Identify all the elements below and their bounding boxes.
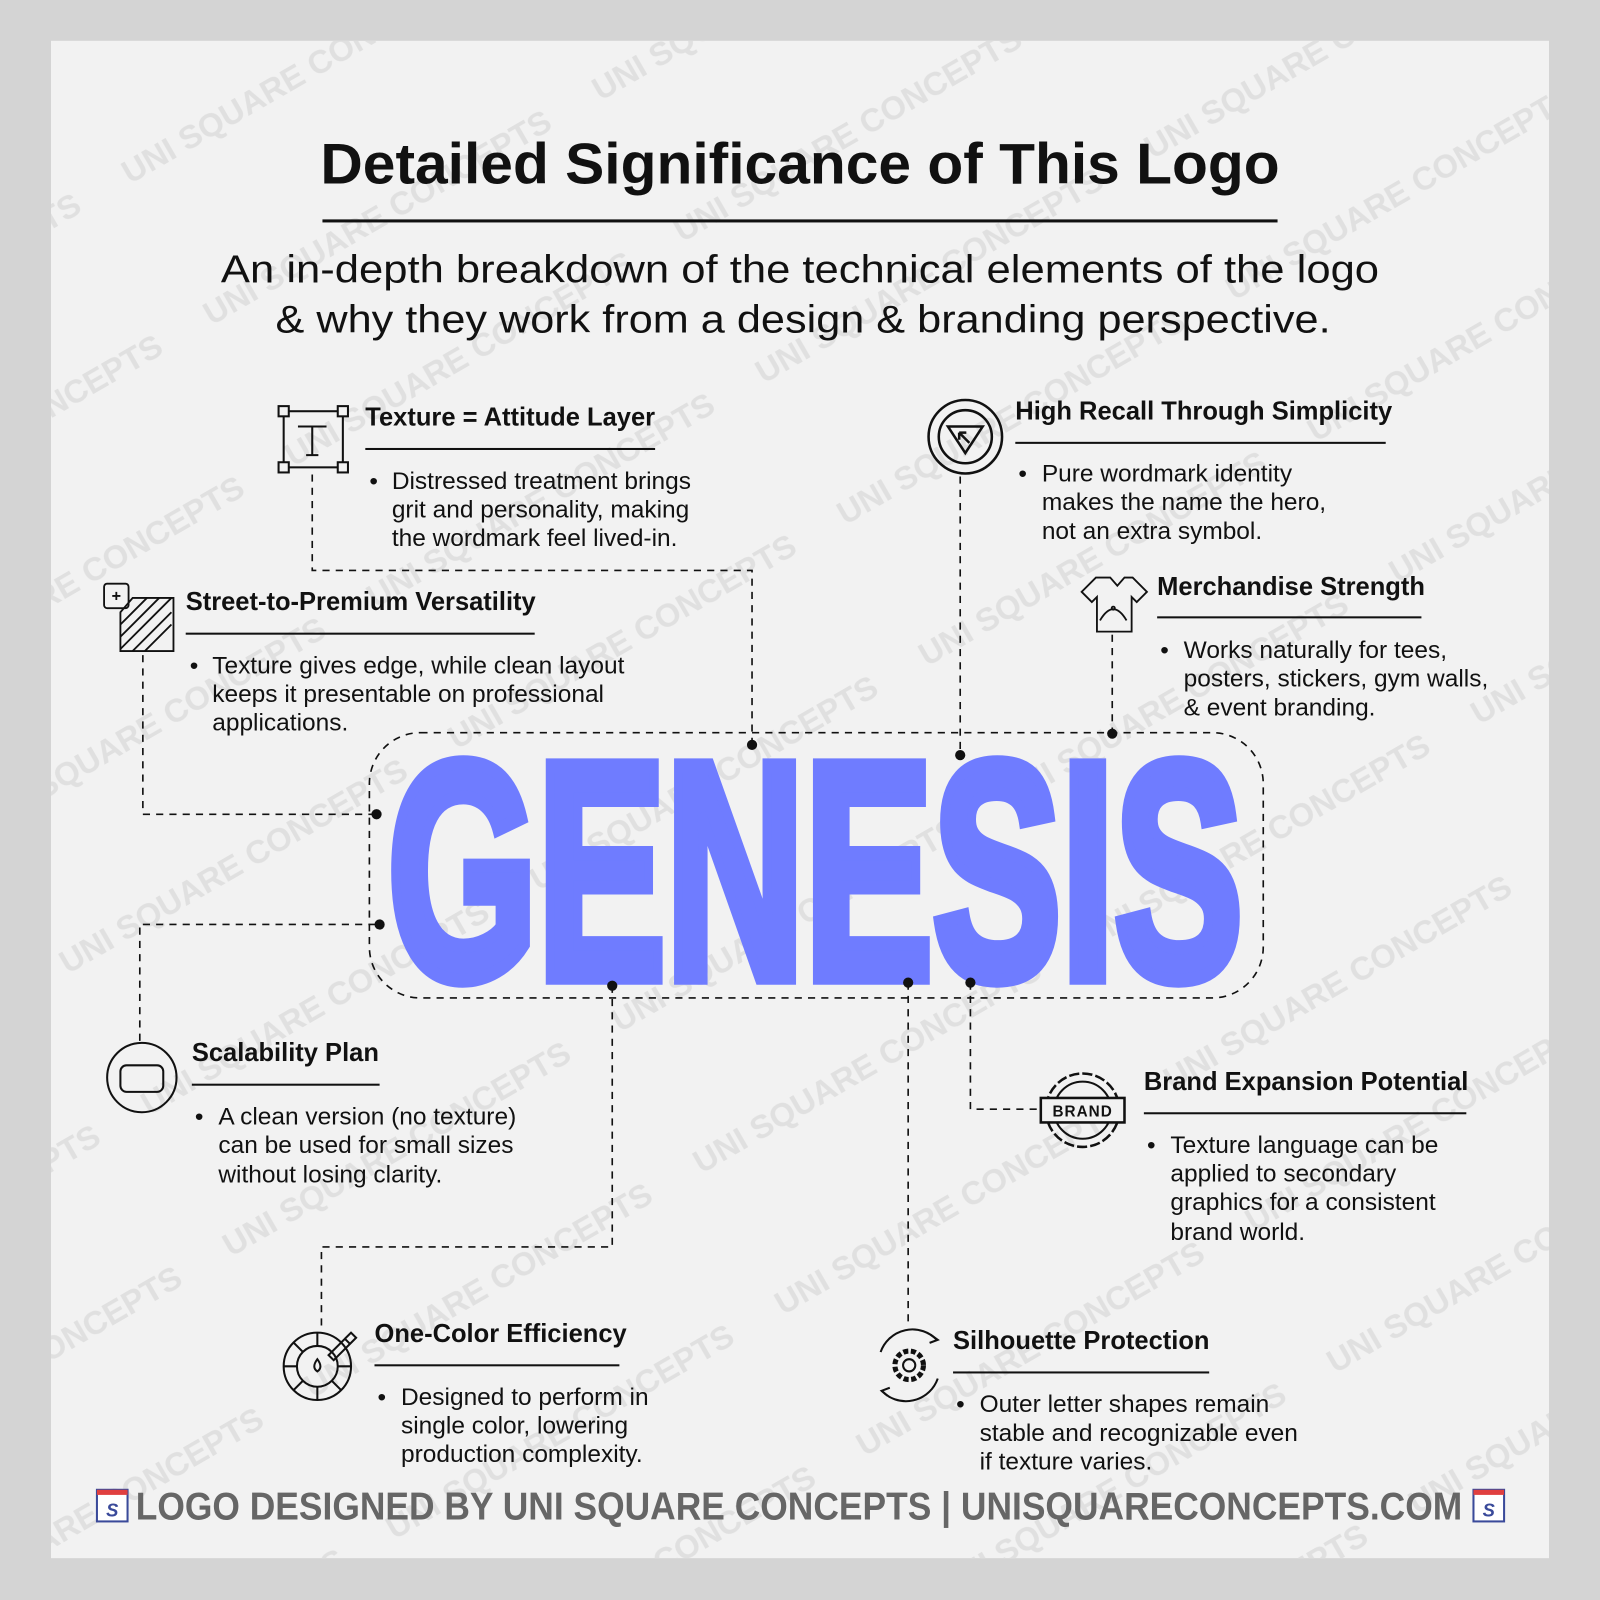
footer credit: LOGO DESIGNED BY UNI SQUARE CONCEPTS | UNISQUARECONCEPTS.COM bbox=[136, 1485, 1462, 1528]
panel: street to premium: Street-to-Premium Versatility bbox=[186, 588, 537, 616]
panel: brand expansion: applied to secondary bbox=[1170, 1161, 1397, 1188]
panel: one-color: One-Color Efficiency bbox=[374, 1320, 628, 1348]
panel: one-color: single color, lowering bbox=[401, 1413, 628, 1440]
panel: merchandise: posters, stickers, gym walls, bbox=[1184, 666, 1488, 693]
icon: left logo: S bbox=[106, 1499, 119, 1520]
panel: texture: • bbox=[369, 468, 378, 495]
panel: high recall: High Recall Through Simplicity bbox=[1015, 397, 1393, 425]
subtitle: An in-depth breakdown of the technical elements of the logo bbox=[221, 249, 1379, 292]
panel: silhouette bbox=[881, 1327, 1298, 1475]
panel: street to premium: keeps it presentable on professional bbox=[212, 681, 604, 708]
subtitle: & why they work from a design & branding perspective. bbox=[276, 299, 1331, 342]
panel: one-color: Designed to perform in bbox=[401, 1384, 649, 1411]
panel: one-color: production complexity. bbox=[401, 1441, 643, 1468]
icon: brand badge bbox=[1041, 1073, 1124, 1147]
panel: texture: the wordmark feel lived-in. bbox=[392, 525, 677, 552]
panel: silhouette: Silhouette Protection bbox=[953, 1327, 1209, 1355]
icon: gear with arrows bbox=[881, 1329, 938, 1401]
panel: merchandise bbox=[1082, 573, 1488, 721]
icon: right logo: S bbox=[1483, 1499, 1496, 1520]
panel: merchandise: Works naturally for tees, bbox=[1184, 637, 1447, 664]
panel: brand expansion: • bbox=[1147, 1132, 1156, 1159]
panel: brand expansion: brand world. bbox=[1170, 1219, 1305, 1246]
icon: left logo bbox=[97, 1490, 128, 1521]
panel: scalability: A clean version (no texture) bbox=[218, 1103, 516, 1130]
panel: brand expansion: graphics for a consistent bbox=[1170, 1189, 1436, 1216]
panel: merchandise: • bbox=[1160, 637, 1169, 664]
icon: text box bbox=[279, 406, 348, 472]
panel: street to premium: • bbox=[190, 652, 198, 679]
icon: brand badge: BRAND bbox=[1052, 1103, 1113, 1120]
panel: brand expansion: Texture language can be bbox=[1170, 1132, 1438, 1159]
panel: texture: Texture = Attitude Layer bbox=[365, 404, 655, 432]
panel: brand expansion: Brand Expansion Potential bbox=[1144, 1068, 1468, 1096]
panel: one-color: • bbox=[378, 1384, 386, 1411]
subtitle bbox=[221, 249, 1379, 342]
panel: scalability: • bbox=[195, 1103, 203, 1130]
panel: texture: grit and personality, making bbox=[392, 496, 689, 523]
panel: one-color bbox=[284, 1320, 649, 1468]
icon: recall circle bbox=[929, 400, 1002, 473]
panel: brand expansion bbox=[1041, 1068, 1468, 1246]
icon: rounded rect in circle bbox=[107, 1043, 177, 1112]
icon: right logo bbox=[1473, 1490, 1504, 1521]
icon: hatched square bbox=[104, 584, 173, 651]
icon: t-shirt bbox=[1082, 578, 1147, 632]
panel: silhouette: if texture varies. bbox=[980, 1448, 1152, 1475]
panel: merchandise: Merchandise Strength bbox=[1157, 573, 1425, 601]
panel: texture: Distressed treatment brings bbox=[392, 468, 691, 495]
panel: high recall bbox=[929, 397, 1393, 545]
connectors bbox=[140, 474, 1112, 1327]
panel: high recall: makes the name the hero, bbox=[1042, 489, 1326, 516]
panel: high recall: • bbox=[1018, 461, 1027, 488]
panel: merchandise: & event branding. bbox=[1184, 694, 1375, 721]
panel: scalability bbox=[107, 1039, 516, 1189]
panel: street to premium: Texture gives edge, while clean layout bbox=[212, 652, 625, 679]
panel: silhouette: stable and recognizable even bbox=[980, 1420, 1298, 1447]
panel: street to premium bbox=[104, 584, 625, 737]
panel: silhouette: Outer letter shapes remain bbox=[980, 1391, 1269, 1418]
icon: color wheel with dropper bbox=[284, 1333, 356, 1400]
title: Detailed Significance of This Logo bbox=[320, 133, 1280, 197]
panel: high recall: Pure wordmark identity bbox=[1042, 461, 1293, 488]
panel: high recall: not an extra symbol. bbox=[1042, 518, 1262, 545]
panel: texture bbox=[279, 404, 691, 552]
panel: silhouette: • bbox=[956, 1391, 965, 1418]
panel: scalability: without losing clarity. bbox=[217, 1162, 442, 1189]
title bbox=[320, 133, 1280, 222]
panel: street to premium: applications. bbox=[212, 710, 348, 737]
panel: scalability: Scalability Plan bbox=[192, 1039, 379, 1067]
panel: scalability: can be used for small sizes bbox=[218, 1132, 513, 1159]
